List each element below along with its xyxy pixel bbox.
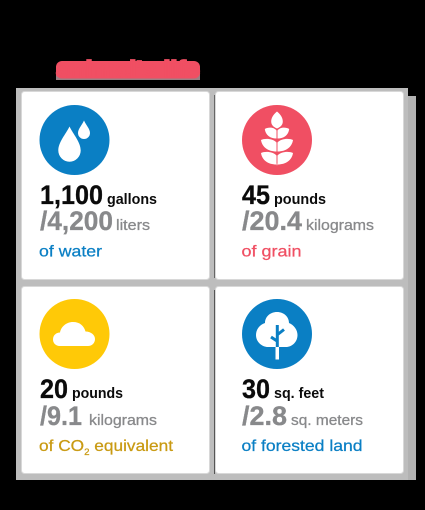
water amount: /4,200 (40, 206, 113, 236)
card grid frame (16, 88, 416, 480)
carbon amount: pounds (72, 385, 123, 402)
grain amount: kilograms (306, 217, 374, 234)
carbon amount: /9.1 (40, 401, 82, 431)
land amount: sq. feet (274, 385, 324, 402)
land amount (242, 374, 363, 455)
carbon amount: equivalent (90, 438, 174, 455)
panel: carbon dioxide (22, 286, 210, 474)
land amount: sq. meters (291, 412, 363, 429)
panel: grain (216, 92, 404, 280)
grain amount: 45 (242, 180, 270, 210)
panel: forested land (216, 286, 404, 474)
land amount: /2.8 (242, 401, 287, 431)
icon: water drops (40, 105, 110, 175)
carbon amount: of CO (39, 438, 81, 455)
water amount: liters (116, 217, 150, 234)
grain amount: /20.4 (242, 206, 302, 236)
grain amount: of grain (242, 244, 302, 260)
icon: wheat (242, 105, 312, 175)
carbon amount: 2 (84, 447, 90, 457)
water amount: of water (39, 244, 103, 260)
carbon amount: kilograms (89, 412, 157, 429)
icon: cloud (40, 299, 110, 369)
title: animal's life (56, 56, 200, 82)
water amount: gallons (107, 191, 157, 208)
land amount: 30 (242, 374, 270, 404)
icon: tree (242, 299, 312, 369)
water amount: 1,100 (40, 180, 103, 210)
carbon amount: 20 (40, 374, 68, 404)
panel: water (22, 92, 210, 280)
land amount: of forested land (242, 438, 362, 455)
carbon amount (39, 374, 174, 457)
grain amount (242, 180, 374, 260)
grain amount: pounds (274, 191, 326, 208)
water amount (39, 180, 157, 260)
